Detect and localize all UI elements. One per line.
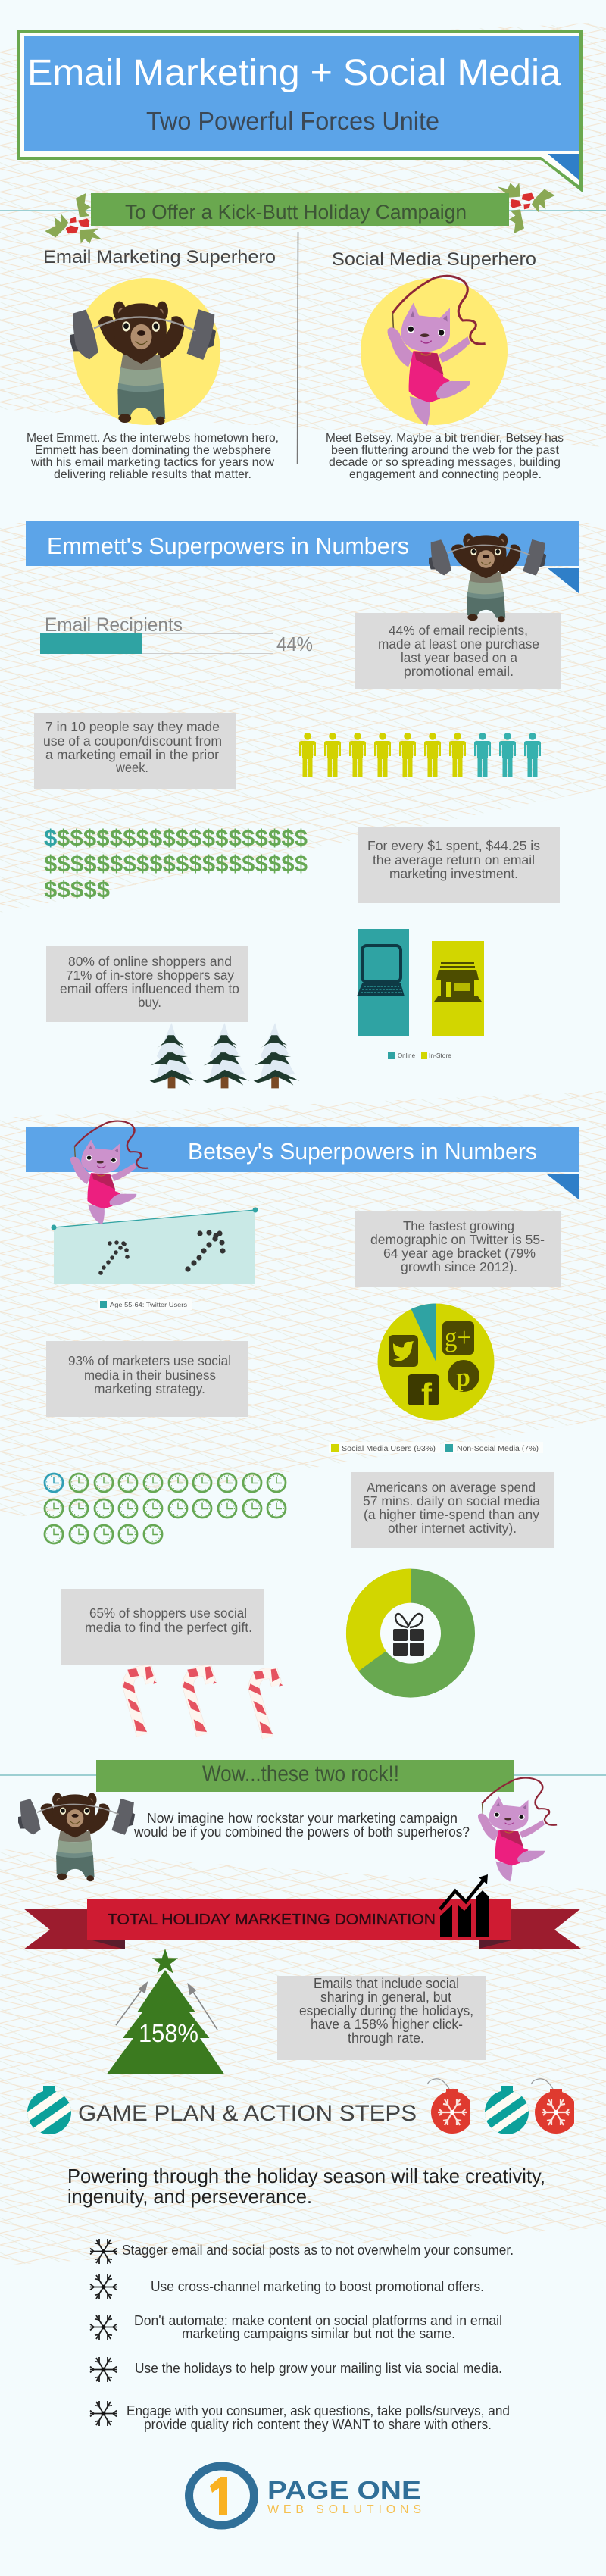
pictogram: dollars: $$$$$$$$$$$$$$$$$$$ [57, 824, 308, 851]
legend: social media: Social Media Users (93%) [342, 1445, 436, 1453]
gray box: 44 percent [355, 613, 561, 689]
gray box: 93 percent: media in their business [84, 1368, 216, 1383]
gray box: return on investment [358, 827, 560, 903]
ribbon text: To Offer a Kick-Butt Holiday Campaign [125, 201, 467, 224]
icon: candy canes [123, 1666, 283, 1737]
arrow right [188, 1984, 217, 2030]
gray box: online shoppers: buy. [138, 995, 161, 1010]
step 3: Don't automate: make content on social platforms and in email [134, 2313, 502, 2328]
gray box: return on investment: marketing investment. [389, 866, 518, 881]
description: engagement and connecting people. [349, 468, 542, 481]
legend: social media [329, 1442, 543, 1453]
yellow circle [73, 278, 220, 425]
gray box: twitter demographic: growth since 2012). [401, 1259, 517, 1274]
icon: star [152, 1949, 178, 1974]
gray box: 57 minutes [351, 1472, 554, 1548]
icon: red ornament [427, 2079, 473, 2134]
icon: holly right [498, 183, 555, 233]
game plan heading [11, 2079, 577, 2143]
icon: facebook [408, 1374, 439, 1412]
gray box: 44 percent: promotional email. [404, 664, 514, 679]
gray box: 65 percent: media to find the perfect gift. [85, 1620, 252, 1635]
pictogram: dollars: $$$$$ [44, 876, 110, 902]
imagine text [133, 1811, 470, 1840]
description [326, 432, 564, 481]
gray box: 57 minutes: Americans on average spend [367, 1480, 536, 1495]
legend: social media: Non-Social Media (7%) [457, 1445, 539, 1453]
description: decade or so spreading messages, building [329, 456, 561, 469]
christmas tree stat [107, 1949, 224, 2074]
description: Emmett has been dominating the websphere [35, 444, 271, 457]
icon: laptop [357, 946, 405, 996]
icon: snowy trees [150, 1023, 299, 1088]
gray box: 65 percent: 65% of shoppers use social [89, 1605, 247, 1621]
icon: holly left [45, 193, 102, 244]
subtitle: Two Powerful Forces Unite [146, 107, 439, 135]
gray box: online shoppers: 71% of in-store shoppers say [66, 968, 234, 983]
description: Meet Emmett. As the interwebs hometown hero, [27, 432, 279, 445]
section header: Betsey: Betsey's Superpowers in Numbers [188, 1138, 537, 1165]
action steps list [90, 2239, 514, 2432]
gray box: 93 percent: marketing strategy. [94, 1381, 205, 1396]
gray box: click-through: Emails that include social [314, 1976, 459, 1991]
step 1: Stagger email and social posts as to not overwhelm your consumer. [122, 2243, 514, 2258]
gray box: 7 in 10: week. [115, 760, 148, 775]
description: Meet Betsey. Maybe a bit trendier, Betsey has [326, 432, 564, 445]
wow banner: Wow...these two rock!! [202, 1762, 399, 1787]
gray box: 57 minutes: (a higher time-spend than any [364, 1507, 539, 1522]
legend: In-Store [429, 1052, 451, 1059]
icon: store [434, 962, 482, 1002]
gray box: online shoppers: email offers influenced them to [60, 981, 239, 996]
gray box: 7 in 10: use of a coupon/discount from [43, 733, 222, 749]
description [27, 432, 279, 481]
logo: Page One [189, 2466, 421, 2525]
step 2 [90, 2274, 484, 2299]
candy cane dots large [185, 1230, 226, 1272]
section header: Betsey [26, 1127, 579, 1199]
logo: Page One: WEB SOLUTIONS [267, 2503, 421, 2516]
chart: email recipients progress bar [40, 614, 313, 655]
gray box: 57 minutes: 57 mins. daily on social media [363, 1493, 540, 1508]
stat text: 158% [139, 2019, 198, 2047]
logo: Page One: PAGE ONE [267, 2476, 421, 2504]
intro text: ingenuity, and perseverance. [67, 2185, 312, 2208]
gray box: click-through: especially during the holidays, [299, 2003, 473, 2018]
heading: Social Media Superhero [332, 249, 536, 270]
gray box: online shoppers: 80% of online shoppers and [68, 954, 232, 969]
gray box: 44 percent: made at least one purchase [378, 636, 539, 652]
step 4 [90, 2357, 502, 2382]
yellow circle [361, 278, 508, 425]
gray box: click-through: sharing in general, but [320, 1990, 451, 2005]
gray box: return on investment: the average return on email [373, 852, 535, 868]
intro text [67, 2165, 545, 2208]
gray box: twitter demographic: demographic on Twitter is 55- [370, 1232, 545, 1247]
holiday ribbon [0, 183, 606, 244]
icon: pinterest [448, 1360, 479, 1392]
icon: gift [393, 1614, 424, 1656]
header banner [17, 30, 583, 192]
ribbon text: TOTAL HOLIDAY MARKETING DOMINATION [108, 1912, 436, 1928]
section header: Emmett [26, 521, 579, 593]
step 5 [90, 2401, 510, 2432]
imagine text: would be if you combined the powers of both superheros? [133, 1824, 470, 1840]
arrow left [116, 1983, 147, 2025]
description: with his email marketing tactics for years now [30, 456, 274, 469]
gray box: 57 minutes: other internet activity). [388, 1521, 517, 1536]
intro text: Powering through the holiday season will take creativity, [67, 2165, 545, 2187]
icon: cat combined [478, 1778, 557, 1882]
chart: email recipients progress bar: 44% [276, 633, 313, 655]
step 2: Use cross-channel marketing to boost promotional offers. [151, 2279, 484, 2294]
gray box: twitter demographic: The fastest growing [403, 1218, 514, 1233]
wow banner [0, 1760, 606, 1792]
icon: red ornament 2 [531, 2079, 577, 2134]
description: delivering reliable results that matter. [54, 468, 251, 481]
gray box: click-through: have a 158% higher click- [311, 2017, 463, 2032]
icon: google plus: g+ [445, 1322, 471, 1352]
panel: social superhero [326, 249, 564, 481]
panel: email superhero [27, 247, 279, 481]
legend: Age 55-64: Twitter Users [110, 1301, 187, 1308]
icon: cat [388, 276, 486, 426]
pictogram: 7 of 10 people [299, 733, 541, 777]
red ribbon [23, 1874, 581, 1949]
pictogram: dollars [44, 824, 308, 902]
chart: online vs in-store bars [357, 929, 484, 1059]
gray box: click-through: through rate. [348, 2030, 424, 2046]
gray box: return on investment: For every $1 spent, $44.25 is [367, 838, 540, 853]
chart: gift donut [346, 1569, 475, 1698]
icon: bear combined [18, 1793, 135, 1881]
legend: Online [398, 1052, 415, 1059]
gray box: 93 percent [46, 1341, 248, 1417]
heading text: GAME PLAN & ACTION STEPS [78, 2101, 417, 2126]
section header: Emmett: Emmett's Superpowers in Numbers [47, 533, 409, 559]
gray box: 7 in 10: 7 in 10 people say they made [45, 719, 220, 734]
gray box: twitter demographic: 64 year age bracket (79% [383, 1246, 536, 1261]
ribbon bar [91, 193, 509, 226]
gray box: 65 percent [61, 1589, 264, 1665]
gray box: online shoppers [46, 946, 248, 1022]
icon: growth chart [440, 1874, 489, 1937]
chart: email recipients progress bar: Email Recipients [45, 614, 183, 636]
icon: cat in header [70, 1121, 148, 1225]
imagine text: Now imagine how rockstar your marketing campaign [147, 1811, 458, 1826]
gray box: twitter demographic [355, 1211, 561, 1287]
pictogram: dollars: $ [44, 824, 57, 851]
pictogram: dollars: $$$$$$$$$$$$$$$$$$$$ [44, 850, 308, 877]
gray box: 44 percent: last year based on a [401, 650, 517, 665]
step 3: marketing campaigns similar but not the same. [182, 2326, 455, 2341]
step 4: Use the holidays to help grow your mailing list via social media. [135, 2361, 502, 2376]
description: been fluttering around the web for the past [331, 444, 560, 457]
heading: Email Marketing Superhero [43, 247, 276, 267]
icon: pinterest: p [456, 1364, 470, 1392]
step 5: Engage with you consumer, ask questions, take polls/surveys, and [127, 2403, 510, 2418]
gray box: 44 percent: 44% of email recipients, [389, 623, 528, 638]
gray box: click-through [277, 1976, 486, 2060]
chart: twitter users area [52, 1208, 258, 1310]
icon: facebook: f [421, 1377, 433, 1412]
step 5: provide quality rich content they WANT to share with others. [144, 2417, 492, 2432]
candy cane dots small [98, 1240, 130, 1275]
icon: teal ornament 2 [469, 2080, 545, 2143]
legend [98, 1299, 192, 1310]
gray box: 7 in 10: a marketing email in the prior [45, 747, 219, 762]
chart: social media pie [377, 1303, 494, 1420]
title: Email Marketing + Social Media [27, 53, 561, 93]
step 3 [90, 2313, 502, 2341]
step 1 [90, 2239, 514, 2264]
gray box: 93 percent: 93% of marketers use social [68, 1353, 231, 1368]
icon: bear in header [429, 533, 546, 622]
icon: teal ornament [11, 2080, 87, 2143]
icon: twitter [389, 1335, 418, 1367]
icon: bear [70, 302, 216, 425]
pictogram: clocks [45, 1474, 286, 1543]
gray box: 7 in 10 [34, 713, 236, 789]
legend [388, 1052, 451, 1059]
